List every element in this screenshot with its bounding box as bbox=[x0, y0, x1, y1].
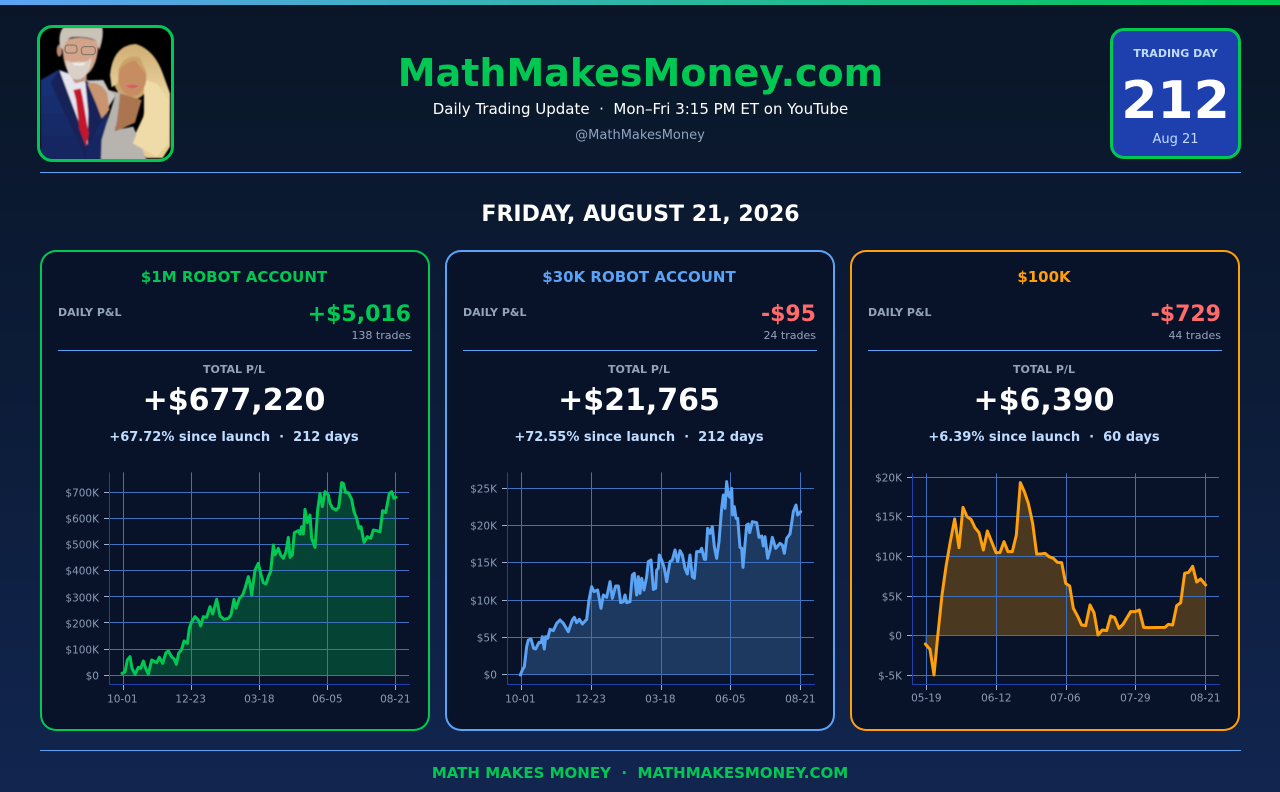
y axis labels: $100K bbox=[65, 645, 100, 657]
y axis labels: $0 bbox=[889, 631, 902, 643]
card title: $30K ROBOT ACCOUNT bbox=[542, 268, 736, 286]
x axis labels: 07-29 bbox=[1120, 693, 1151, 705]
total value: +$677,220 bbox=[143, 383, 325, 418]
handle: @MathMakesMoney bbox=[575, 128, 705, 143]
x axis labels: 10-01 bbox=[505, 694, 536, 706]
trades: 44 trades bbox=[1168, 329, 1221, 342]
card title: $100K bbox=[1017, 268, 1071, 286]
y axis labels: $0 bbox=[86, 671, 99, 683]
x axis labels bbox=[911, 693, 1221, 705]
trading day badge bbox=[1110, 28, 1241, 159]
x axis labels: 06-12 bbox=[981, 693, 1012, 705]
top gradient bar bbox=[0, 0, 1280, 5]
since launch: +6.39% since launch · 60 days bbox=[928, 430, 1160, 445]
x axis labels: 06-05 bbox=[312, 694, 343, 706]
chart: $30K equity curve bbox=[470, 472, 816, 706]
total label: TOTAL P/L bbox=[1013, 363, 1075, 376]
card title: $1M ROBOT ACCOUNT bbox=[141, 268, 327, 286]
footer divider bbox=[40, 750, 1241, 751]
y axis labels: $5K bbox=[477, 633, 498, 645]
x axis labels: 03-18 bbox=[645, 694, 676, 706]
daily value: +$5,016 bbox=[308, 302, 411, 327]
y axis labels: $600K bbox=[65, 514, 100, 526]
y axis labels bbox=[875, 473, 903, 683]
x axis labels: 05-19 bbox=[911, 693, 942, 705]
y axis labels: $700K bbox=[65, 488, 100, 500]
y axis labels: $300K bbox=[65, 592, 100, 604]
badge number: 212 bbox=[1121, 71, 1230, 131]
since launch: +67.72% since launch · 212 days bbox=[109, 430, 359, 445]
equity line bbox=[520, 482, 801, 675]
equity line bbox=[122, 483, 396, 674]
x axis labels: 12-23 bbox=[575, 694, 606, 706]
daily label: DAILY P&L bbox=[58, 306, 122, 319]
equity line bbox=[925, 483, 1206, 675]
y axis labels bbox=[65, 488, 100, 683]
x axis labels: 08-21 bbox=[380, 694, 411, 706]
daily value: -$95 bbox=[761, 302, 816, 327]
x axis labels: 12-23 bbox=[175, 694, 206, 706]
y axis labels: $15K bbox=[875, 512, 903, 524]
panel: $30K robot account bbox=[445, 250, 835, 731]
panel: $1M robot account bbox=[40, 250, 430, 731]
daily label: DAILY P&L bbox=[868, 306, 932, 319]
subtitle: Daily Trading Update · Mon–Fri 3:15 PM ET on YouTube bbox=[433, 100, 848, 118]
y axis labels: $20K bbox=[470, 521, 498, 533]
y axis labels: $0 bbox=[484, 670, 497, 682]
total value: +$21,765 bbox=[558, 383, 720, 418]
y axis labels: $5K bbox=[882, 592, 903, 604]
title: MathMakesMoney.com bbox=[398, 51, 883, 95]
since launch: +72.55% since launch · 212 days bbox=[514, 430, 764, 445]
y axis labels bbox=[470, 484, 498, 682]
date heading: FRIDAY, AUGUST 21, 2026 bbox=[481, 202, 800, 227]
badge date: Aug 21 bbox=[1152, 132, 1199, 147]
total label: TOTAL P/L bbox=[203, 363, 265, 376]
y axis labels: $400K bbox=[65, 566, 100, 578]
daily label: DAILY P&L bbox=[463, 306, 526, 319]
trades: 24 trades bbox=[763, 329, 816, 342]
x axis labels bbox=[107, 694, 411, 706]
chart: $100K equity curve bbox=[875, 473, 1221, 705]
x axis labels bbox=[505, 694, 816, 706]
y axis labels: $20K bbox=[875, 473, 903, 485]
y axis labels: $-5K bbox=[878, 671, 903, 683]
x axis labels: 07-06 bbox=[1050, 693, 1081, 705]
panel: $100K account bbox=[850, 250, 1240, 731]
x axis labels: 03-18 bbox=[244, 694, 275, 706]
x axis labels: 10-01 bbox=[107, 694, 138, 706]
y axis labels: $500K bbox=[65, 540, 100, 552]
daily value: -$729 bbox=[1151, 302, 1221, 327]
header divider bbox=[40, 172, 1241, 173]
y axis labels: $200K bbox=[65, 618, 100, 630]
badge label: TRADING DAY bbox=[1133, 47, 1218, 60]
x axis labels: 08-21 bbox=[785, 694, 816, 706]
chart: $1M equity curve bbox=[65, 472, 411, 706]
photo: hosts portrait bbox=[37, 25, 174, 162]
total label: TOTAL P/L bbox=[608, 363, 670, 376]
trades: 138 trades bbox=[351, 329, 411, 342]
y axis labels: $25K bbox=[470, 484, 498, 496]
y axis labels: $10K bbox=[470, 596, 498, 608]
total value: +$6,390 bbox=[974, 383, 1114, 418]
x axis labels: 06-05 bbox=[715, 694, 746, 706]
footer text: MATH MAKES MONEY · MATHMAKESMONEY.COM bbox=[432, 764, 848, 782]
y axis labels: $15K bbox=[470, 558, 498, 570]
x axis labels: 08-21 bbox=[1190, 693, 1221, 705]
y axis labels: $10K bbox=[875, 552, 903, 564]
